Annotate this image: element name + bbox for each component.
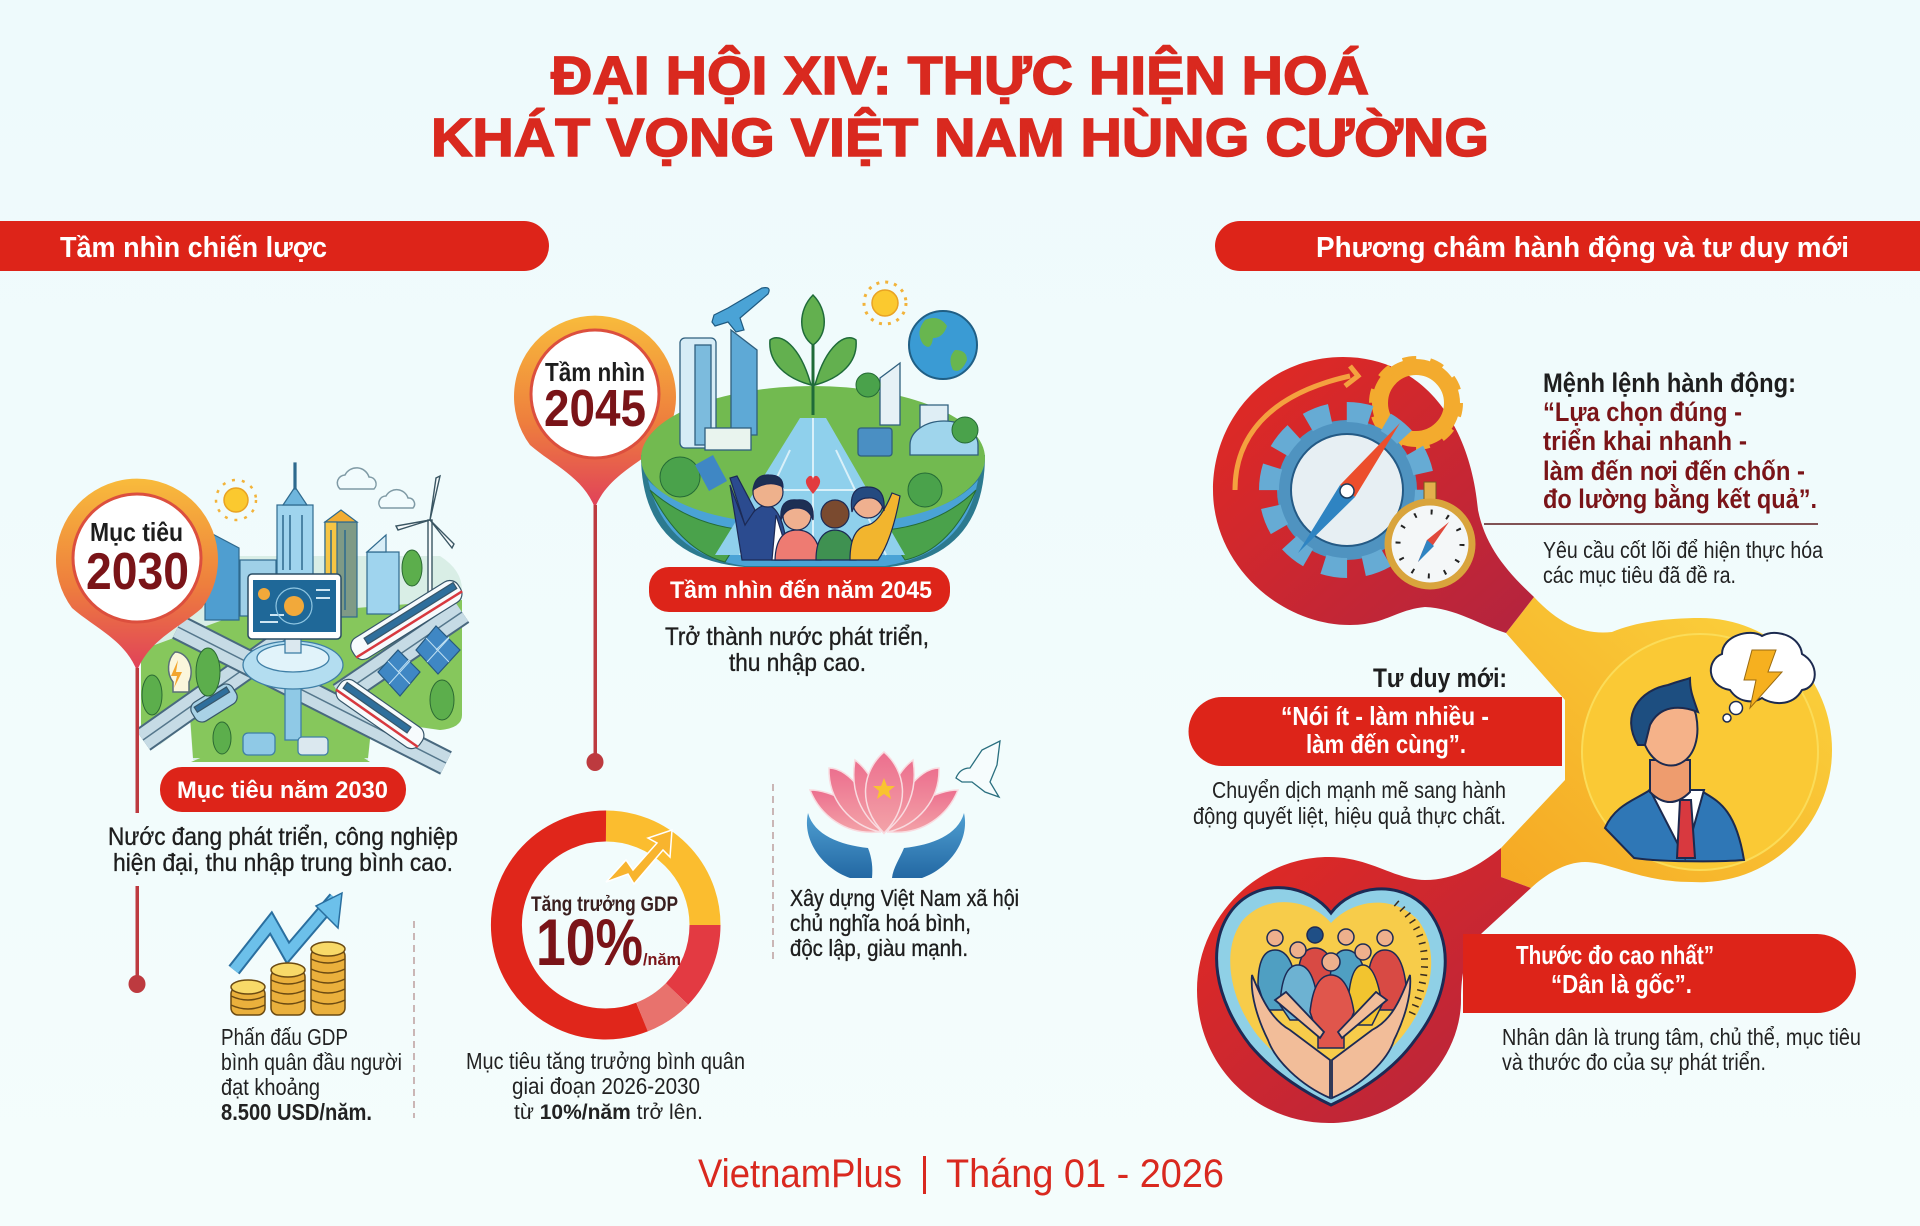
pill: Nói ít làm nhiều	[1189, 697, 1562, 766]
pill: Mục tiêu năm 2030	[160, 767, 406, 812]
illustration: smart city 2030	[141, 463, 466, 763]
text: mục tiêu 2030	[108, 823, 458, 877]
text: Mệnh lệnh hành động: triển khai nhanh -	[1543, 426, 1747, 456]
dove	[956, 741, 1000, 797]
panel: yellow thinking bubble	[1501, 597, 1832, 888]
trees	[660, 373, 978, 507]
text: Mệnh lệnh hành động: “Lựa chọn đúng -	[1543, 397, 1742, 427]
text: nhân dân là trung tâm	[1502, 1024, 1861, 1075]
text: Mệnh lệnh hành động: Mệnh lệnh hành động:	[1543, 368, 1796, 398]
sun	[864, 282, 906, 324]
footer: Tháng 01 - 2026	[946, 1152, 1224, 1196]
text: Mệnh lệnh hành động: đo lường bằng kết quả”.	[1543, 483, 1817, 514]
clouds	[337, 468, 415, 508]
chart: GDP growth donut: Tăng trưởng GDP	[531, 893, 678, 916]
hands	[807, 813, 965, 878]
buildings	[205, 463, 399, 620]
title	[431, 45, 1489, 168]
road	[143, 612, 462, 763]
text: mục tiêu tăng trưởng	[466, 1048, 745, 1124]
text: Xây dựng Việt Nam: chủ nghĩa hoá bình,	[790, 910, 971, 936]
text: tầm nhìn 2045: thu nhập cao.	[729, 649, 866, 677]
gauge ticks	[1396, 903, 1425, 1018]
section header: Tầm nhìn chiến lược	[0, 221, 549, 271]
chart: GDP growth donut: 10%	[536, 905, 643, 979]
text: mục tiêu tăng trưởng: từ 10%/năm trở lên.	[514, 1101, 703, 1124]
icon: lotus and dove with hands	[807, 741, 1000, 878]
text: yêu cầu cốt lõi: Yêu cầu cốt lõi để hiện thực hóa	[1543, 537, 1823, 563]
title: KHÁT VỌNG VIỆT NAM HÙNG CƯỜNG	[431, 107, 1489, 168]
text: mục tiêu 2030: hiện đại, thu nhập trung bình cao.	[113, 849, 453, 877]
footer: VietnamPlus	[698, 1152, 902, 1196]
pill: Thước đo cao nhất: Thước đo cao nhất”	[1516, 940, 1714, 970]
text: GDP bình quân đầu người: đạt khoảng	[221, 1074, 320, 1100]
pill: Nói ít làm nhiều: làm đến cùng”.	[1306, 729, 1466, 759]
icon: gold arrow	[606, 830, 672, 884]
text: chuyển dịch: Chuyển dịch mạnh mẽ sang hành	[1212, 777, 1506, 803]
pin: Tầm nhìn 2045: 2045	[544, 380, 646, 438]
pill: Nói ít làm nhiều: “Nói ít - làm nhiều -	[1281, 701, 1489, 731]
text: GDP bình quân đầu người: 8.500 USD/năm.	[221, 1099, 372, 1125]
wind turbine	[396, 476, 454, 595]
text: chuyển dịch: động quyết liệt, hiệu quả thực chất.	[1193, 803, 1506, 829]
people group	[1258, 927, 1406, 1048]
pin: Mục tiêu 2030: 2030	[86, 543, 189, 601]
panel: red heart bubble	[1197, 848, 1531, 1123]
text: Xây dựng Việt Nam: độc lập, giàu mạnh.	[790, 935, 968, 961]
timeline: 2045	[586, 505, 604, 771]
text: nhân dân là trung tâm: và thước đo của sự phát triển.	[1502, 1049, 1766, 1075]
title: ĐẠI HỘI XIV: THỰC HIỆN HOÁ	[551, 45, 1369, 106]
illustration: vision 2045 green city	[641, 282, 985, 568]
text: Mệnh lệnh hành động	[1543, 368, 1817, 514]
text: tầm nhìn 2045: Trở thành nước phát triển,	[665, 623, 929, 651]
pill: Thước đo cao nhất: “Dân là gốc”.	[1551, 969, 1692, 999]
people	[730, 475, 900, 560]
icon: coins and rising arrow	[231, 893, 345, 1015]
footer	[698, 1152, 1224, 1196]
central platform	[243, 635, 343, 755]
section header: Tầm nhìn chiến lược: Tầm nhìn chiến lược	[60, 232, 327, 264]
trees and bulb	[142, 550, 454, 754]
panel: red compass bubble	[1213, 357, 1534, 633]
text: mục tiêu tăng trưởng: giai đoạn 2026-2030	[512, 1073, 700, 1099]
pill: Tầm nhìn đến năm 2045: Tầm nhìn đến năm 2045	[670, 577, 932, 604]
pill: Tầm nhìn đến năm 2045	[649, 567, 950, 612]
text: yêu cầu cốt lõi	[1543, 537, 1823, 588]
solar panels	[378, 626, 460, 696]
text: GDP bình quân đầu người	[221, 1024, 402, 1125]
trains	[188, 577, 466, 753]
buildings	[680, 330, 978, 456]
monitor	[248, 574, 341, 639]
globe	[909, 311, 977, 379]
text: mục tiêu 2030: Nước đang phát triển, công nghiệp	[108, 823, 458, 851]
icon: yellow gear	[1374, 361, 1458, 445]
plant	[770, 295, 856, 415]
icon: businessman	[1605, 678, 1744, 861]
pin: Tầm nhìn 2045	[514, 316, 676, 508]
timeline: 2030	[128, 668, 146, 993]
pill: Thước đo cao nhất	[1463, 934, 1856, 1013]
plane	[712, 288, 769, 332]
sun	[216, 480, 256, 520]
icon: stopwatch	[1388, 482, 1472, 586]
pin: Mục tiêu 2030: Mục tiêu	[90, 517, 183, 547]
chart: GDP growth donut: /năm	[643, 950, 681, 969]
pin: Tầm nhìn 2045: Tầm nhìn	[545, 357, 645, 387]
text: GDP bình quân đầu người: Phấn đấu GDP	[221, 1024, 348, 1050]
text: tầm nhìn 2045	[665, 623, 929, 677]
pin: Mục tiêu 2030	[56, 479, 218, 671]
chart: GDP growth donut	[506, 826, 705, 1024]
text: Xây dựng Việt Nam	[790, 885, 1019, 961]
pill: Mục tiêu năm 2030: Mục tiêu năm 2030	[177, 777, 388, 804]
text: chuyển dịch	[1193, 777, 1506, 829]
icon: compass gear	[1269, 412, 1425, 568]
section header: Phương châm hành động và tư duy mới	[1215, 221, 1920, 271]
text: GDP bình quân đầu người: bình quân đầu người	[221, 1049, 402, 1075]
text: Xây dựng Việt Nam: Xây dựng Việt Nam xã hội	[790, 885, 1019, 911]
text: nhân dân là trung tâm: Nhân dân là trung tâm, chủ thể, mục tiêu	[1502, 1024, 1861, 1050]
text: mục tiêu tăng trưởng: Mục tiêu tăng trưởng bình quân	[466, 1048, 745, 1074]
text: yêu cầu cốt lõi: các mục tiêu đã đề ra.	[1543, 562, 1736, 588]
grass corner	[191, 715, 370, 762]
section header: Phương châm hành động và tư duy mới: Phương châm hành động và tư duy mới	[1316, 232, 1849, 264]
icon: thought cloud with bolt	[1711, 633, 1815, 722]
heading: Tư duy mới: Tư duy mới:	[1373, 663, 1507, 693]
text: Mệnh lệnh hành động: làm đến nơi đến chốn -	[1543, 456, 1805, 486]
hands	[1252, 975, 1410, 1098]
icon: heart	[1217, 888, 1445, 1105]
